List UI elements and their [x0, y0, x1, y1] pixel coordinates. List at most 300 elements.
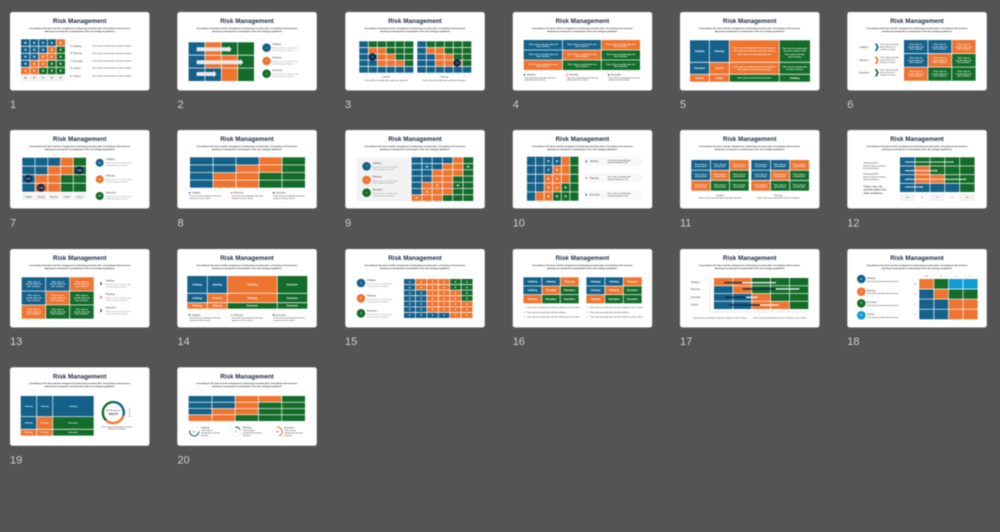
matrix: clear solutions [27, 313, 40, 316]
subtitle: Consulting to the basic and the management of planning execution plan. Consulting to the business [196, 27, 298, 30]
panel: slide 15 [345, 249, 485, 328]
subtitle: Consulting to the basic and the management of planning execution plan. Consulting to the business [364, 27, 466, 30]
legend panel: Business process solutions plan [373, 179, 398, 182]
legend: Understanding of all details [106, 299, 127, 302]
legend with chevrons: solutions to clients [880, 61, 896, 64]
matrix: clear solutions [614, 45, 627, 48]
legend: That's why we provide plain and clear [189, 317, 221, 320]
stat: planning: solutions [243, 434, 250, 437]
legend panel: 1 [366, 166, 367, 168]
matrix: Planning [212, 298, 223, 300]
matrix: That's why we provide plain and [529, 63, 558, 66]
legend pills: Planning [590, 178, 599, 180]
matrix: provide plain and [74, 284, 90, 286]
captions: Planning [774, 195, 783, 197]
right matrix: That's why we [793, 163, 806, 166]
matrix: clear solutions [957, 61, 970, 64]
left text: Initiating (60%) [863, 162, 878, 165]
title: Risk Management [220, 18, 275, 25]
legend: Planning [234, 315, 244, 317]
left text: Business process solutions [863, 164, 886, 167]
matrix [22, 277, 94, 319]
legend: Execution [611, 74, 622, 77]
right matrix: Execution [627, 289, 639, 292]
left matrix [691, 160, 749, 191]
subtitle [364, 27, 466, 33]
legend: Initiating [867, 277, 876, 280]
heat grid [189, 396, 305, 421]
right matrix: Execution [627, 298, 639, 301]
matrix: That's why we [910, 43, 922, 46]
legend: Understanding of all details [367, 300, 389, 303]
legend: B [860, 292, 862, 294]
left matrix: provide plain [733, 176, 746, 178]
title: Risk Management [556, 136, 610, 143]
matrix: That's why we provide [785, 53, 805, 56]
title: Risk Management [388, 255, 443, 262]
legend panel: Understanding of all details [373, 194, 394, 197]
subtitle [196, 27, 298, 33]
captions: That's why we provide plain and clear solutions [757, 197, 800, 200]
legend: Understanding of all details [272, 75, 294, 78]
matrix: clear solutions [575, 65, 589, 68]
left matrix: Execution [564, 298, 576, 301]
subtitle [29, 27, 131, 33]
legend panel: Initiating [373, 162, 382, 165]
legend: Understanding of all details [272, 49, 294, 52]
subtitle: Consulting to the basic and the management of planning execution plan. Consulting to the business [196, 145, 298, 148]
matrix: Initiating [193, 284, 203, 286]
stat: initiating: Initiating [201, 426, 210, 429]
left matrix: provide plain [695, 176, 708, 178]
matrix [904, 40, 976, 81]
legend [96, 158, 132, 200]
value markers [24, 166, 83, 192]
matrix: clear solutions [957, 75, 970, 78]
legend: Execution [106, 191, 117, 194]
row labels [691, 281, 702, 306]
left text: Business process solutions [863, 175, 886, 178]
arrows [197, 46, 243, 78]
slide number 15: 15 [345, 336, 357, 348]
legend: Initiating [367, 279, 376, 282]
stat: initiating: That's why we [201, 429, 213, 432]
legend list: That's why we provide plain and clear solutions [92, 60, 132, 63]
subtitle [532, 264, 634, 270]
left text: plan and all details [863, 178, 879, 181]
legend: Business process solutions plan [272, 60, 298, 63]
panel: slide 2 [177, 12, 317, 90]
matrix: clear solutions [75, 313, 88, 316]
subtitle [29, 382, 131, 388]
value markers: 3.4% [77, 169, 82, 172]
subtitle: planning of meeting the essential goals of the risk strategy & guidelines [547, 148, 618, 151]
subtitle [699, 145, 801, 151]
legend: Business process solutions plan [106, 310, 131, 313]
right matrix [586, 277, 642, 303]
subtitle: planning of meeting the essential goals of the risk strategy & guidelines [45, 385, 116, 388]
subtitle [866, 27, 968, 33]
subtitle: planning of meeting the essential goals of the risk strategy & guidelines [882, 267, 953, 270]
matrix: That's why we [957, 43, 970, 46]
matrix: That's why we provide plain and [606, 53, 636, 56]
legend: Understanding of all details [106, 312, 127, 315]
title: Risk Management [388, 18, 443, 25]
matrix: Execution [694, 67, 706, 70]
left bullets: That's why we provide plain and clear solutions to all our clients [527, 316, 580, 319]
donut caption [101, 425, 133, 431]
matrix: provide plain and [50, 311, 66, 313]
right matrix: That's why we [774, 173, 786, 176]
right matrix: provide plain [755, 176, 768, 178]
subtitle: Consulting to the basic and the management of planning execution plan. Consulting to the business [29, 264, 131, 267]
legend: Execution [867, 301, 877, 304]
matrix: provide plain and [932, 46, 948, 48]
legend: solutions to all our clients [189, 319, 210, 322]
left matrix: That's why we [714, 173, 726, 176]
matrix: provide plain and [50, 284, 66, 286]
matrix: That's why we provide plain and clear solutions [733, 50, 776, 53]
matrix: Execution [287, 304, 298, 308]
legend: 1 [360, 283, 362, 285]
legend: Planning [106, 176, 116, 178]
legend: That's why we provide plain and clear [524, 76, 556, 79]
subtitle [866, 264, 968, 270]
subtitle: Consulting to the basic and the management of planning execution plan. Consulting to the business [699, 264, 801, 267]
subtitle: Consulting to the basic and the management of planning execution plan. Consulting to the business [29, 145, 131, 148]
legend: Execution [272, 69, 283, 72]
right matrix: Planning [591, 299, 601, 301]
matrix: clear solutions [75, 299, 88, 302]
row labels: Control [691, 303, 699, 306]
legend: Planning [367, 295, 377, 297]
subtitle: planning of meeting the essential goals of the risk strategy & guidelines [715, 148, 786, 151]
legend: That's why we provide plain and clear [867, 304, 898, 307]
matrix: That's why we [933, 70, 946, 73]
legend: Understanding of all details [367, 285, 389, 288]
subtitle: planning of meeting the essential goals of the risk strategy & guidelines [45, 267, 116, 270]
left matrix: provide plain [714, 176, 727, 178]
axis letters: C [955, 276, 957, 278]
matrix: That's why we [27, 294, 40, 297]
stat: initiating: solutions [201, 434, 209, 437]
axis labels: A [907, 196, 909, 199]
axis letters: B [941, 276, 943, 278]
legend: Planning [272, 57, 282, 59]
matrix [21, 396, 94, 436]
left matrix: provide plain [733, 166, 746, 168]
subtitle [29, 145, 131, 151]
matrix: Execution [69, 431, 79, 434]
legend list: A. Initiating [70, 45, 82, 48]
matrix: That's why we provide plain [782, 47, 808, 50]
subtitle: Consulting to the basic and the management of planning execution plan. Consulting to the business [196, 264, 298, 267]
subtitle: Consulting to the basic and the management of planning execution plan. Consulting to the business [866, 27, 968, 30]
legend with chevrons: Initiating [859, 46, 869, 49]
matrix: That's why we [957, 70, 970, 73]
captions: That's why we provide plain and clear solutions [698, 197, 742, 200]
legend: Business process solutions plan [272, 73, 298, 76]
panel: slide 5 [680, 12, 820, 90]
subtitle: planning of meeting the essential goals of the risk strategy & guidelines [380, 267, 451, 270]
legend: Planning [569, 75, 579, 77]
footnotes: That's why we provide plain and clear solutions to all our clients [693, 317, 746, 320]
legend list: That's why we provide plain and clear solutions [92, 45, 132, 48]
heat grid [900, 157, 975, 192]
marker circles: 3 [372, 57, 373, 59]
legend pills: and clear solutions to all [607, 178, 628, 181]
title: Risk Management [723, 18, 777, 25]
panel: slide 17 [680, 249, 820, 328]
stat: execution: solutions [284, 434, 292, 437]
subtitle: planning of meeting the essential goals of the risk strategy & guidelines [45, 148, 116, 151]
left matrix: That's why we [695, 163, 707, 166]
right matrix: Execution [609, 298, 620, 301]
subtitle: planning of meeting the essential goals of the risk strategy & guidelines [882, 30, 953, 33]
legend: 3 [360, 313, 362, 315]
right bullets [587, 306, 643, 319]
axis letters: A [926, 275, 928, 278]
legend: Control [867, 313, 874, 316]
subtitle [196, 145, 298, 151]
right matrix: provide plain [793, 186, 806, 188]
matrix: Control [715, 67, 724, 70]
left matrix: Initiating [528, 280, 538, 283]
matrix: clear solutions [933, 48, 946, 51]
title: Risk Management [723, 136, 777, 143]
slide number 5: 5 [680, 99, 686, 111]
legend: That's why we provide plain and clear [867, 316, 898, 319]
matrix: provide plain and [26, 298, 42, 300]
legend: Initiating [192, 192, 201, 195]
legend panel: 2 [366, 180, 367, 182]
subtitle [364, 145, 466, 151]
matrix: provide plain and [956, 60, 972, 62]
stat: planning: provide plain and clear [243, 431, 262, 434]
legend: Initiating [106, 158, 115, 161]
matrix: That's why we [27, 280, 40, 283]
left matrix: provide plain [714, 186, 727, 188]
matrix: Planning [247, 298, 258, 300]
left matrix: Planning [565, 281, 575, 283]
legend panel: 3 [366, 192, 367, 194]
legend: 2 [266, 61, 267, 63]
axis labels [22, 193, 85, 200]
matrix: clear solutions [614, 65, 627, 68]
matrix: provide plain and [26, 284, 42, 286]
legend: Business process solutions plan [367, 313, 393, 316]
matrix: Initiating [695, 50, 705, 53]
left grid [359, 41, 413, 73]
legend: Business process solutions plan [106, 283, 131, 286]
slide number 20: 20 [178, 454, 190, 466]
white arrows [905, 161, 966, 188]
legend: That's why we provide plain and clear [189, 195, 221, 198]
title: Risk Management [220, 255, 275, 262]
axis letters: C [915, 304, 917, 306]
subtitle [866, 145, 968, 151]
donut legend [129, 408, 131, 416]
right matrix: That's why we [793, 183, 806, 186]
legend: Initiating [527, 74, 536, 77]
panel: slide 7 [10, 130, 150, 208]
matrix: provide plain and [956, 46, 972, 48]
legend: solutions to all our clients [189, 197, 210, 200]
legend [357, 279, 393, 318]
slide number 14: 14 [178, 336, 190, 348]
legend: Initiating [106, 280, 115, 282]
legend: Execution [106, 306, 117, 310]
gantt grid [714, 278, 808, 309]
slide number 4: 4 [513, 99, 519, 111]
donut caption: solutions to all clients [108, 428, 126, 431]
subtitle [699, 264, 801, 270]
matrix: That's why we provide plain and clear solutions [733, 66, 776, 68]
value markers: 2.1% [26, 178, 31, 180]
legend: 2% [98, 179, 101, 181]
legend list: That's why we provide plain and clear solutions [92, 52, 132, 55]
matrix: That's why we [51, 308, 64, 311]
matrix: clear solutions [536, 55, 550, 58]
matrix: That's why we provide plain and [567, 53, 597, 56]
legend pills: Execution [590, 194, 601, 196]
subtitle: planning of meeting the essential goals of the risk strategy & guidelines [212, 30, 283, 33]
subtitle: Consulting to the basic and the management of planning execution plan. Consulting to the business [364, 264, 466, 267]
legend: Execution [276, 314, 287, 317]
axis labels: Initiating [25, 195, 32, 198]
legend with chevrons: plain and clear sol [880, 59, 896, 62]
matrix: and clear solutions. That [784, 50, 806, 52]
right matrix: That's why we [755, 173, 767, 176]
legend: Understanding of all details [272, 62, 294, 65]
slide number 12: 12 [847, 218, 860, 230]
axis labels: D [951, 197, 953, 199]
legend with chevrons: Planning [859, 60, 869, 62]
subtitle: planning of meeting the essential goals of the risk strategy & guidelines [380, 30, 451, 33]
left matrix: provide plain [733, 186, 746, 188]
title: Risk Management [890, 18, 945, 25]
matrix: That's why we provide plain and clear [737, 53, 771, 56]
matrix: Initiating [41, 405, 49, 408]
right matrix: That's why we [793, 173, 806, 176]
right matrix: That's why we [774, 183, 786, 186]
left matrix: That's why we [695, 183, 707, 186]
right matrix: provide plain [755, 166, 768, 168]
left bullets [524, 306, 580, 319]
legend: Understanding of all details [367, 315, 389, 318]
legend: solutions to all our clients [273, 197, 294, 200]
heat grid [21, 39, 65, 81]
matrix: That's why we provide plain and clear [737, 68, 771, 71]
matrix: Initiating [69, 405, 78, 408]
slide number 18: 18 [847, 336, 860, 348]
legend pills: That's why we provide plain [607, 159, 631, 162]
right matrix: Initiating [591, 280, 601, 283]
axis labels [900, 194, 975, 201]
right matrix: Initiating [609, 280, 619, 283]
slide number 16: 16 [513, 336, 525, 348]
matrix: clear solutions [575, 45, 589, 48]
left matrix: Planning [528, 299, 538, 301]
legend: Understanding of all details [106, 197, 128, 200]
donut chart [103, 402, 124, 423]
slide number 2: 2 [178, 99, 184, 111]
matrix: provide plain and [50, 298, 66, 300]
matrix: clear solutions [75, 285, 88, 288]
matrix: That's why we [910, 70, 922, 73]
legend: solutions to all our clients [232, 197, 253, 200]
axis letters: B [915, 294, 917, 296]
legend [100, 280, 131, 315]
subtitle: planning of meeting the essential goals of the risk strategy & guidelines [715, 30, 786, 33]
left matrix: provide plain [695, 186, 708, 188]
matrix: Planning [714, 51, 725, 53]
legend panel: Planning [373, 177, 382, 179]
matrix: Initiating [790, 77, 800, 80]
legend: Business process solutions plan [106, 195, 132, 198]
donut chart: ₹28,170 [109, 412, 119, 416]
legend with chevrons: Execution [859, 72, 870, 74]
left text: That's why we [863, 184, 883, 188]
matrix: That's why we provide plain and [529, 53, 558, 56]
heat grid [919, 279, 978, 319]
legend list: E. Closure [70, 75, 81, 78]
matrix: That's why we [75, 294, 88, 297]
matrix: That's why we provide plain [782, 66, 808, 68]
legend pills: and clear solutions to all [607, 194, 628, 198]
matrix: clear solutions [51, 285, 64, 288]
legend list: D. Control [70, 67, 81, 70]
left matrix: Initiating [546, 280, 556, 283]
subtitle [364, 264, 466, 270]
title: Risk Management [890, 255, 945, 262]
panel: slide 8 [177, 130, 317, 208]
left matrix [523, 277, 579, 303]
legend: C [860, 303, 862, 305]
subtitle: Consulting to the basic and the management of planning execution plan. Consulting to the business [29, 382, 131, 385]
matrix: Planning [25, 432, 34, 434]
right bullets: That's why we provide plain and clear solutions [590, 311, 629, 314]
subtitle: planning of meeting the essential goals of the risk strategy & guidelines [547, 267, 618, 270]
right matrix: provide plain [774, 186, 787, 188]
panel: slide 13 [10, 249, 150, 328]
matrix: clear solutions [909, 75, 923, 78]
legend with chevrons: solutions to clients [880, 73, 896, 76]
panel: slide 3 [345, 12, 485, 90]
slide number 13: 13 [10, 336, 22, 348]
matrix: clear solutions [909, 48, 923, 51]
right bullets: That's why we provide plain and clear solutions to all our clients [590, 316, 643, 319]
title: Risk Management [388, 136, 443, 143]
right bullets: That's why we provide plain and clear solutions to all our clients [590, 306, 643, 309]
legend with chevrons: That's why we provide [880, 43, 899, 46]
legend with chevrons: plain and clear sol [880, 46, 896, 49]
matrix: clear solutions [27, 299, 40, 302]
subtitle: Consulting to the basic and the management of planning execution plan. Consulting to the business [29, 27, 131, 30]
left matrix: That's why we [714, 183, 726, 186]
heat grid [412, 157, 473, 201]
left text: provide plain and [863, 188, 886, 192]
axis letters: D [970, 276, 972, 278]
footnotes: That's why we provide plain and clear solutions to all our clients [753, 317, 806, 320]
title: Risk Management [53, 255, 107, 262]
legend: That's why we provide plain and clear [273, 195, 305, 198]
left matrix: That's why we [695, 173, 707, 176]
matrix: clear solutions [957, 48, 970, 51]
stat: execution: provide plain and clear [284, 431, 304, 434]
matrix: Initiating [213, 284, 223, 286]
panel: slide 1 [10, 12, 150, 90]
